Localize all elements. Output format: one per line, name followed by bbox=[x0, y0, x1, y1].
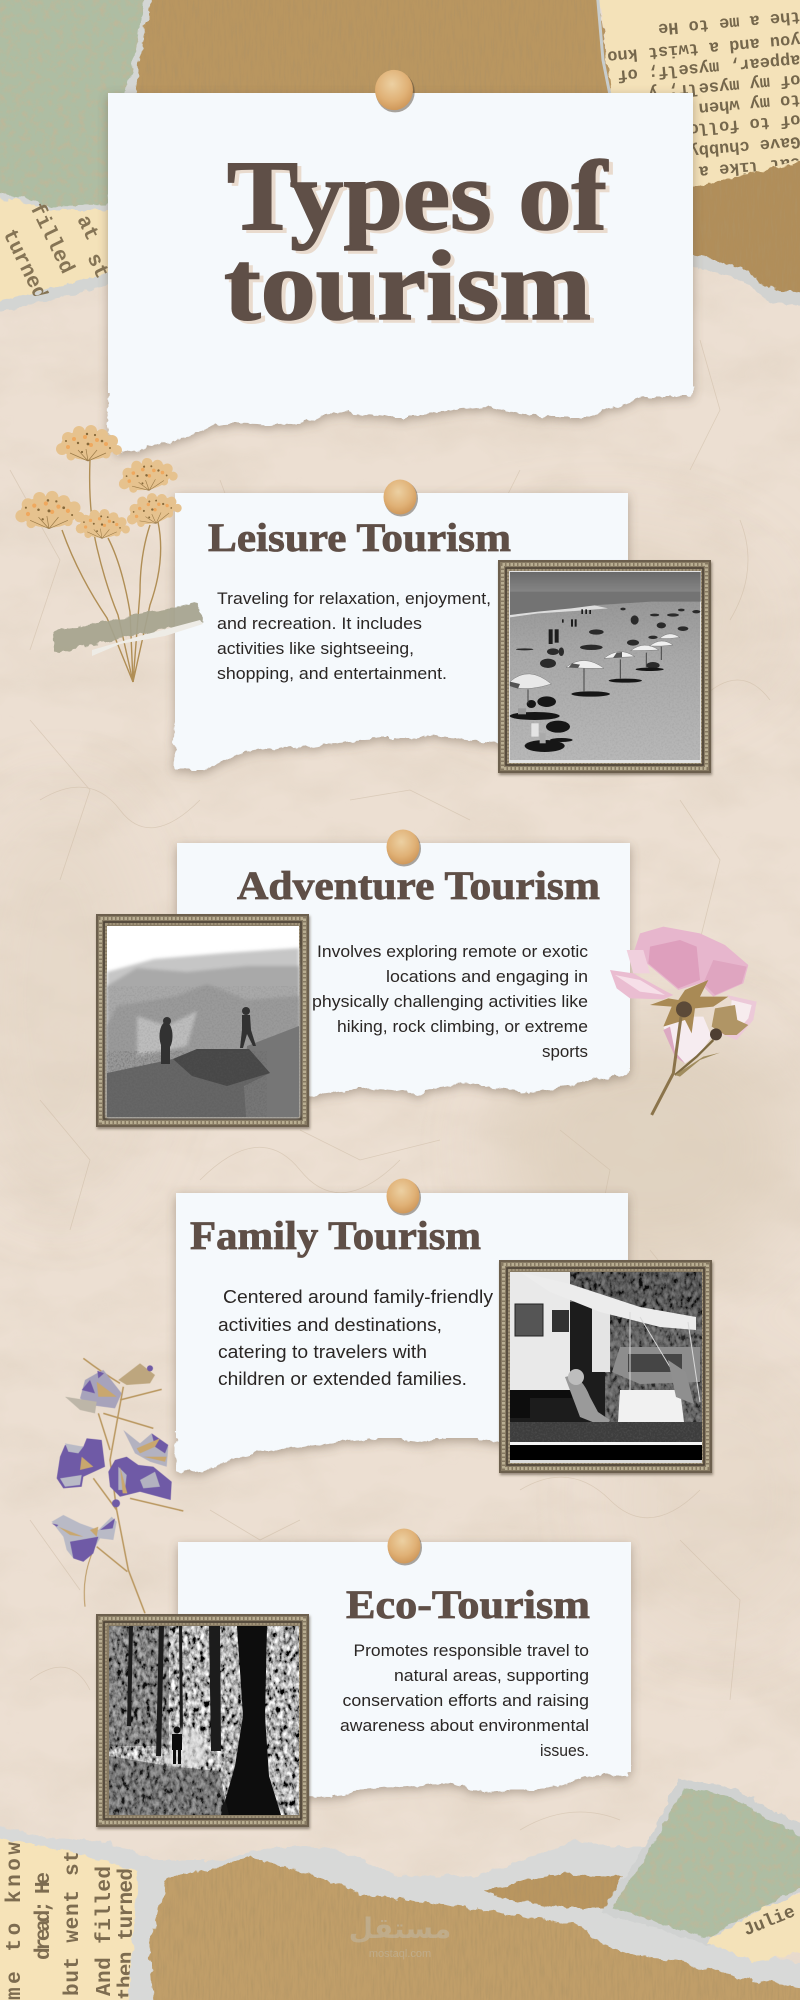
panel: family tourism bbox=[175, 1193, 628, 1472]
text: eco description: natural areas, supporting bbox=[394, 1666, 589, 1685]
heading: family tourism: Family Tourism bbox=[190, 1213, 481, 1258]
text: family description bbox=[218, 1287, 493, 1389]
pin: adventure bbox=[386, 830, 421, 866]
text: family description: Centered around family-friendly bbox=[223, 1287, 493, 1307]
torn paper: bottom left newsprint: me to know bbox=[4, 1842, 27, 2000]
torn paper: newsprint top right: eat like a bbox=[698, 152, 800, 180]
torn paper: newsprint top right: the a me to He bbox=[657, 6, 800, 37]
pin: leisure bbox=[384, 480, 418, 516]
torn paper: bottom right newsprint: Julie bbox=[741, 1902, 798, 1941]
text: adventure description bbox=[312, 942, 589, 1061]
text: family description: catering to travelers with bbox=[218, 1342, 427, 1362]
text: eco description: Promotes responsible travel to bbox=[354, 1641, 589, 1660]
torn paper: bottom small kraft strip bbox=[482, 1874, 622, 1908]
heading: eco-tourism: Eco-Tourism bbox=[346, 1582, 590, 1627]
panel: adventure tourism bbox=[177, 843, 630, 1095]
torn paper: newsprint top right: Gave chubby bbox=[688, 131, 800, 160]
title: Types of bbox=[231, 143, 613, 254]
text: adventure description: hiking, rock climbing, or extreme bbox=[337, 1017, 588, 1036]
torn paper: bottom white edge band bbox=[0, 1826, 800, 2000]
pin: family bbox=[386, 1178, 421, 1216]
watermark: مستقل bbox=[349, 1912, 451, 1945]
text: leisure description: activities like sightseeing, bbox=[217, 639, 414, 658]
photo: forest in frame bbox=[96, 1614, 309, 1827]
torn paper: newsprint top right: to my when with bbox=[647, 89, 800, 121]
icon: pressed purple flowers bbox=[52, 1358, 183, 1613]
photo: caravan in frame bbox=[499, 1260, 712, 1473]
panel: leisure tourism bbox=[174, 493, 628, 770]
torn paper: newsprint top right: e time bbox=[738, 174, 800, 198]
panel: eco-tourism bbox=[178, 1542, 631, 1797]
photo: climbers in frame bbox=[96, 914, 309, 1127]
heading: leisure tourism: Leisure Tourism bbox=[208, 515, 511, 560]
torn paper: bottom main kraft bbox=[150, 1857, 800, 2000]
tape bbox=[53, 603, 203, 656]
icon: dried rose bbox=[610, 927, 757, 1115]
text: family description: children or extended families. bbox=[218, 1369, 467, 1389]
torn paper: bottom left newsprint: dread; He bbox=[33, 1872, 56, 1960]
torn paper: newsprint top right bbox=[595, 0, 800, 200]
torn paper: green top left bbox=[0, 0, 152, 218]
icon: dried umbel flowers bbox=[15, 425, 184, 682]
heading: adventure tourism: Adventure Tourism bbox=[237, 863, 600, 908]
text: adventure description: locations and engaging in bbox=[386, 967, 588, 986]
text: eco description: awareness about environmental bbox=[340, 1716, 589, 1735]
torn paper: newsprint top left: st bbox=[81, 250, 112, 283]
photo: beach in frame bbox=[498, 560, 711, 773]
text: adventure description: physically challenging activities like bbox=[312, 992, 588, 1011]
title: Types of bbox=[227, 140, 609, 251]
panel: title paper bbox=[107, 93, 693, 455]
text: family description: activities and destinations, bbox=[218, 1315, 442, 1335]
text: leisure description bbox=[217, 589, 491, 683]
torn paper: bottom left newsprint bbox=[0, 1836, 139, 2000]
torn paper: newsprint top right: you and a twist know bbox=[595, 29, 800, 66]
title bbox=[224, 140, 613, 344]
title: tourism bbox=[228, 233, 595, 344]
torn paper: kraft top bbox=[126, 0, 612, 180]
torn paper: bottom left newsprint: And filled bbox=[94, 1866, 117, 1996]
text: leisure description: shopping, and entertainment. bbox=[217, 664, 447, 683]
text: eco description bbox=[340, 1641, 589, 1760]
torn paper: bottom right newsprint bbox=[705, 1890, 800, 1962]
text: eco description: conservation efforts and raising bbox=[342, 1691, 589, 1710]
torn paper: newsprint top left: filled bbox=[24, 200, 78, 278]
text: leisure description: Traveling for relaxation, enjoyment, bbox=[217, 589, 491, 608]
text: adventure description: sports bbox=[542, 1042, 588, 1061]
torn paper: newsprint top left bbox=[0, 198, 112, 314]
text: adventure description: Involves exploring remote or exotic bbox=[317, 942, 589, 961]
torn paper: bottom green scrap bbox=[600, 1778, 800, 1945]
pin: title bbox=[375, 70, 415, 112]
watermark bbox=[349, 1912, 451, 1960]
torn paper: bottom left newsprint: then turned bbox=[116, 1868, 139, 2000]
torn paper: newsprint top left: at bbox=[71, 212, 102, 245]
torn paper: newsprint top right: of to follow bbox=[677, 109, 800, 139]
pin: eco bbox=[388, 1528, 422, 1566]
watermark: mostaql.com bbox=[369, 1948, 431, 1960]
title: tourism bbox=[224, 230, 591, 341]
text: leisure description: and recreation. It includes bbox=[217, 614, 422, 633]
torn paper: bottom left newsprint: but went st bbox=[62, 1850, 85, 1996]
text: eco description: issues. bbox=[540, 1741, 589, 1760]
torn paper: kraft right bbox=[660, 150, 800, 305]
torn paper: newsprint top right: of my myself; y bbox=[647, 69, 800, 101]
torn paper: newsprint top right: appear, myself; of bbox=[617, 49, 800, 84]
